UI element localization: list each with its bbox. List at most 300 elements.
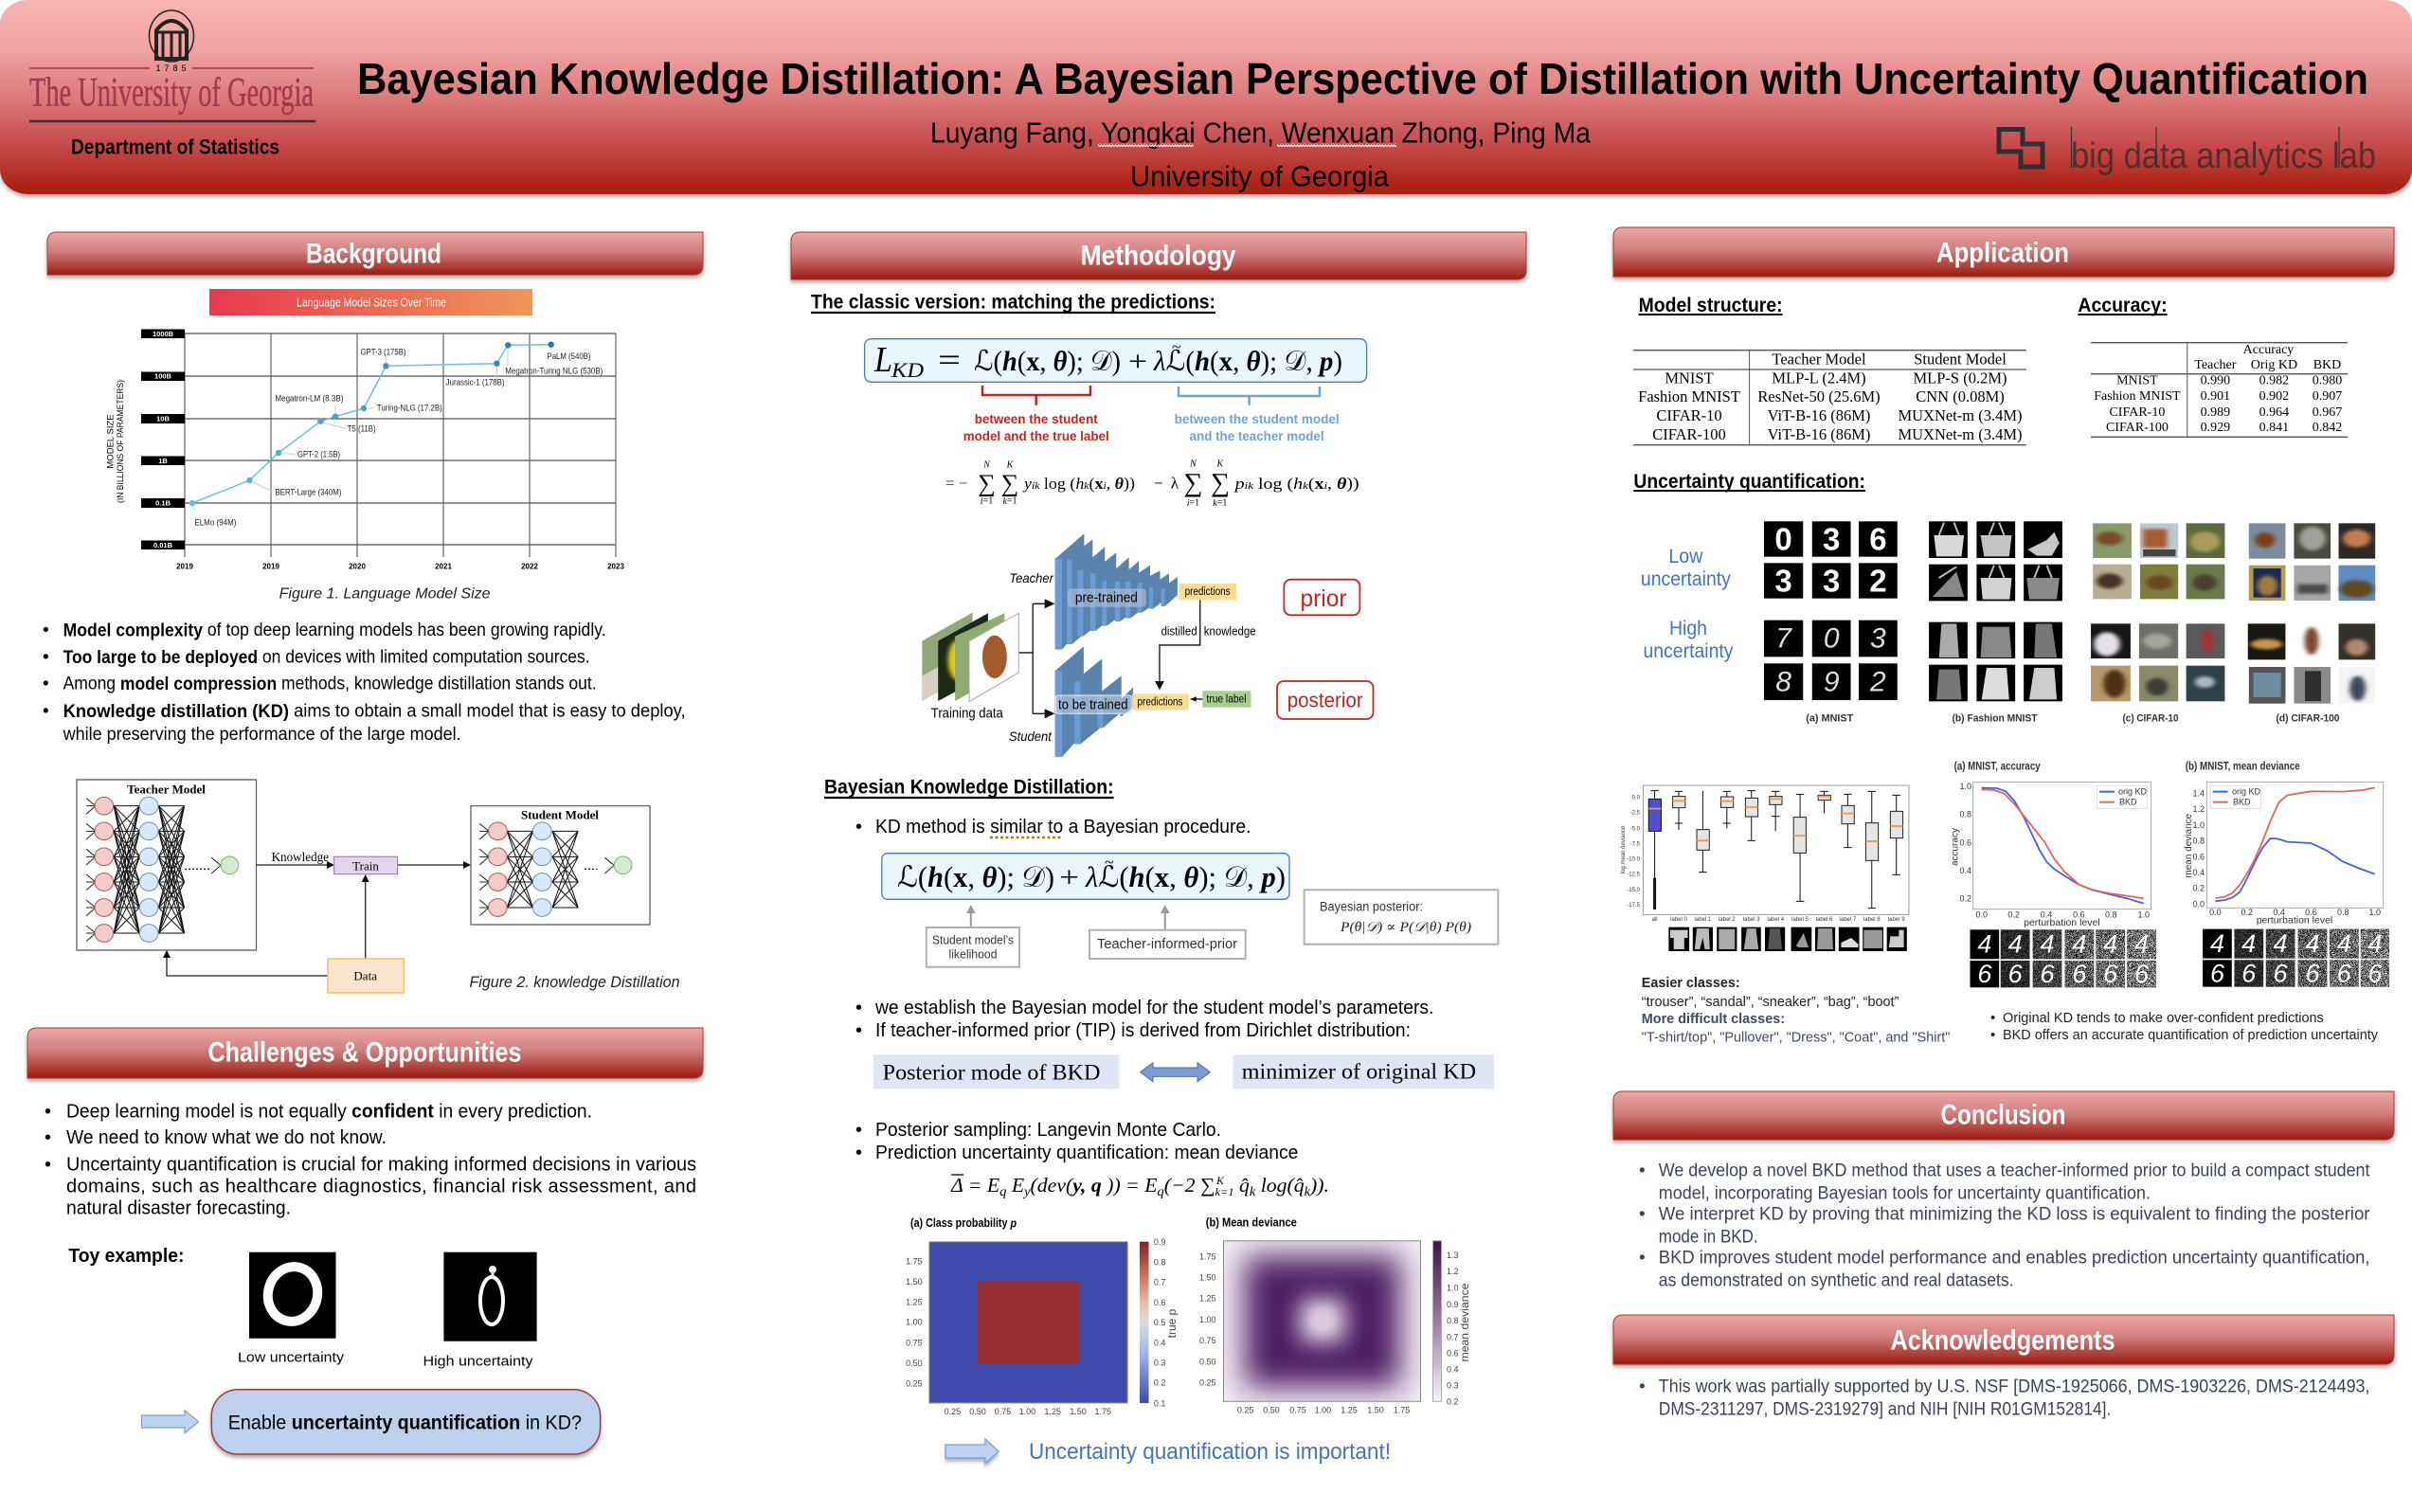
plot grid <box>141 330 616 557</box>
formula: KD loss: + <box>1128 346 1147 377</box>
image: low uncertainty digit: Low uncertainty <box>238 1349 345 1366</box>
formula: mean deviance: k=1 <box>1215 1185 1234 1198</box>
box plot axis labels: label 7 <box>1840 917 1857 923</box>
image grid captions <box>1806 712 2340 724</box>
background bullet list <box>43 621 686 745</box>
image grid: perturbed digits: 6 <box>2241 959 2257 987</box>
box: Bayesian posterior: P(θ|𝒟) ∝ P(𝒟|θ) P(θ) <box>1340 920 1471 935</box>
heatmap b tick labels: 0.2 <box>1447 1397 1459 1407</box>
arrows: likelihood and prior pointers <box>971 911 1165 930</box>
bullets: sampling and uncertainty: Prediction uncertainty quantification: mean deviance <box>875 1143 1298 1163</box>
box plot axis labels: label 6 <box>1816 917 1833 923</box>
table: model structure: Fashion MNIST <box>1638 387 1740 405</box>
table: accuracy: 0.989 <box>2201 405 2230 420</box>
chart: MNIST accuracy: 0.8 <box>1959 810 1971 819</box>
panel: conclusion <box>1613 1091 2394 1290</box>
chart: MNIST accuracy: 1.0 <box>1959 782 1971 791</box>
background bullet list: • <box>43 648 49 667</box>
heatmap b tick labels: 0.4 <box>1447 1365 1459 1375</box>
chart: MNIST accuracy: 0.0 <box>1975 909 1988 919</box>
heading: challenges and opportunities <box>27 1028 703 1078</box>
diagram: knowledge distillation <box>77 780 650 993</box>
heading: acknowledgements: Acknowledgements <box>1891 1324 2115 1357</box>
chart: mean deviance heatmap: (b) Mean deviance <box>1206 1215 1297 1230</box>
table: accuracy: 0.964 <box>2259 405 2289 420</box>
formula: expanded sums: k <box>1303 480 1309 492</box>
heatmap b tick labels: 1.00 <box>1199 1315 1216 1324</box>
department label: Department of Statistics <box>71 135 279 159</box>
heading: methodology: Methodology <box>1081 241 1236 271</box>
chart: MNIST accuracy: 0.6 <box>2073 909 2085 919</box>
heading: application: Application <box>1936 237 2069 269</box>
heatmap a tick labels: 1.50 <box>1070 1407 1087 1416</box>
x axis labels: 2019 <box>176 563 193 570</box>
heading: acknowledgements <box>1613 1315 2394 1364</box>
formula: expanded sums: k=1 <box>1213 498 1227 508</box>
chart: MNIST mean deviance: orig KD <box>2232 787 2261 797</box>
network text labels: true label <box>1207 693 1247 705</box>
formula: expanded sums: θ)) <box>1337 474 1358 493</box>
formula box: loss and posterior correspondence <box>882 853 1289 899</box>
data line and points <box>189 341 554 511</box>
box plot axis labels: -10.0 <box>1627 856 1641 862</box>
chart title banner <box>209 289 532 315</box>
formula: expanded sums: K <box>1006 460 1015 470</box>
acknowledgement text <box>1639 1377 2370 1419</box>
table: accuracy: 0.901 <box>2201 389 2230 404</box>
table: accuracy: 0.967 <box>2313 405 2342 420</box>
table: accuracy: CIFAR-10 <box>2109 405 2165 420</box>
bullets: application takeaways: Original KD tends to make over-confident predictions <box>2003 1010 2324 1026</box>
formula: expanded sums: h <box>1293 474 1309 493</box>
chart: MNIST accuracy: 0.2 <box>1959 894 1971 904</box>
panel: acknowledgements <box>1613 1315 2394 1419</box>
formula: expanded sums: x <box>1094 474 1104 493</box>
y axis tick labels: 0.1B <box>155 498 171 508</box>
formula: mean deviance: q <box>999 1185 1006 1199</box>
conclusion bullet list: model, incorporating Bayesian tools for uncertainty quantification. <box>1659 1184 2151 1203</box>
network text labels: to be trained <box>1058 697 1128 712</box>
chart: language model sizes over time <box>106 289 624 570</box>
callout: prior: prior <box>1300 585 1347 612</box>
image grid: MNIST samples: 3 <box>1823 563 1840 599</box>
model labels: BERT-Large (340M) <box>275 487 341 498</box>
chart: MNIST mean deviance: 0.6 <box>2305 908 2317 917</box>
table: model structure: ViT-B-16 (86M) <box>1768 406 1870 424</box>
table: accuracy: BKD <box>2313 358 2341 372</box>
teacher network layers <box>1055 533 1236 650</box>
formula: expanded sums: i=1 <box>1187 498 1199 508</box>
network text labels: predictions <box>1185 586 1231 598</box>
image grid: perturbed digits: 6 <box>2210 959 2225 987</box>
model labels: Jurassic-1 (178B) <box>446 377 505 388</box>
image grid: MNIST samples: 7 <box>1775 623 1792 654</box>
formula: expanded sums: i <box>1323 480 1327 492</box>
bullets: Bayesian model: we establish the Bayesian model for the student model’s parameters. <box>874 998 1433 1018</box>
chart: MNIST mean deviance: 1.0 <box>2192 820 2205 830</box>
chart: class probability heatmap: (a) Class probability p <box>910 1215 1017 1230</box>
table: model structure: CIFAR-10 <box>1656 406 1722 424</box>
box: student likelihood: likelihood <box>949 947 997 961</box>
table: accuracy: 0.841 <box>2259 421 2289 435</box>
x axis labels: 2021 <box>435 563 452 570</box>
acknowledgement text: This work was partially supported by U.S. NSF [DMS-1925066, DMS-1903226, DMS-2124493, <box>1659 1377 2370 1396</box>
subheading: accuracy: Accuracy: <box>2078 295 2168 316</box>
table: accuracy: Accuracy <box>2243 343 2294 357</box>
y axis title <box>106 380 125 503</box>
panel: challenges and opportunities <box>27 1028 703 1454</box>
y axis tick labels: 0.01B <box>153 541 173 549</box>
conclusion statement: Uncertainty quantification is important! <box>1029 1439 1391 1465</box>
heatmap a tick labels: 0.2 <box>1154 1378 1165 1388</box>
image grid: perturbed digits: 4 <box>2305 929 2320 958</box>
image grid: perturbed digits: 4 <box>1977 930 1991 959</box>
image grid: perturbed digits: 4 <box>2273 929 2288 958</box>
formula: expanded sums: − λ <box>1154 474 1179 493</box>
subheading: model structure: Model structure: <box>1639 295 1783 316</box>
formula: mean deviance: y <box>1022 1185 1031 1199</box>
formula: mean deviance: k <box>1250 1185 1256 1199</box>
box: student likelihood: Student model’s <box>932 932 1014 947</box>
chart: MNIST mean deviance: 0.0 <box>2192 900 2205 909</box>
formula: mean deviance <box>950 1174 1329 1199</box>
arrow <box>945 1439 999 1464</box>
panel: application <box>1613 227 2394 1046</box>
text: easier and harder classes: “trouser”, “sandal”, “sneaker”, “bag”, “boot” <box>1642 994 1899 1010</box>
conclusion bullet list: BKD improves student model performance and enables prediction uncertainty quantification, <box>1659 1249 2370 1268</box>
train and data flow arrows: Data <box>353 968 377 983</box>
challenges bullet list: natural disaster forecasting. <box>66 1197 291 1218</box>
heatmap b tick labels: 1.0 <box>1447 1284 1459 1293</box>
network text labels: Student <box>1009 729 1053 744</box>
y axis tick labels <box>153 330 174 549</box>
label: high uncertainty: uncertainty <box>1643 640 1734 662</box>
image grid: perturbed digits: 6 <box>2103 960 2118 988</box>
formula: KD loss: L <box>873 340 892 380</box>
heatmap a tick labels: 0.7 <box>1154 1278 1165 1287</box>
heatmap a tick labels: 0.6 <box>1154 1298 1165 1307</box>
y axis title: (IN BILLIONS OF PARAMETERS) <box>116 380 125 503</box>
heatmap a tick labels: 0.9 <box>1154 1237 1165 1247</box>
heatmap b tick labels: 0.7 <box>1447 1332 1459 1341</box>
bullets: Bayesian model <box>855 998 1433 1041</box>
model labels: ELMo (94M) <box>194 517 236 529</box>
icon: University of Georgia arch logo <box>150 10 193 62</box>
heatmap a tick labels: 0.1 <box>1154 1398 1165 1408</box>
student model box: Student Model <box>521 807 599 822</box>
label: low uncertainty: uncertainty <box>1641 568 1731 590</box>
image grid: perturbed digits: 6 <box>1977 960 1992 988</box>
table: model structure: MLP-S (0.2M) <box>1913 369 2007 387</box>
callout: posterior: posterior <box>1287 688 1363 712</box>
toy example label: Toy example: <box>68 1246 184 1267</box>
formula: mean deviance: k <box>1305 1185 1311 1199</box>
formula: expanded sums: , <box>1107 474 1115 493</box>
formula: mean deviance: q <box>1158 1185 1164 1199</box>
University of Georgia wordmark: The University of Georgia <box>29 70 314 116</box>
formula: expanded sums: ik <box>1032 480 1041 492</box>
challenges bullet list: Deep learning model is not equally confident in every prediction. <box>66 1101 592 1122</box>
logo rule and year: 1785 <box>155 63 186 73</box>
x axis labels: 2020 <box>349 563 366 570</box>
heatmap b tick labels: 1.50 <box>1367 1405 1384 1414</box>
box plot axis labels: -2.5 <box>1630 811 1641 817</box>
conclusion bullet list: • <box>1639 1161 1646 1180</box>
image grid: perturbed digits: 4 <box>2103 930 2117 959</box>
chart: MNIST accuracy <box>1951 762 2151 928</box>
train and data flow arrows: Train <box>352 858 379 873</box>
arrow <box>142 1411 199 1433</box>
box plot axis labels: label 2 <box>1719 917 1736 923</box>
image grid: perturbed digits: 4 <box>2040 930 2055 959</box>
heatmap a tick labels: 0.3 <box>1154 1358 1165 1367</box>
chart: MNIST accuracy: accuracy <box>1951 828 1961 866</box>
formula: expanded sums: ∑ <box>1001 470 1018 496</box>
train and data flow arrows: Knowledge <box>272 850 329 864</box>
chart: MNIST mean deviance: 1.0 <box>2368 908 2381 917</box>
challenges bullet list: Uncertainty quantification is crucial for making informed decisions in various <box>66 1154 696 1175</box>
network text labels: distilled <box>1161 623 1197 639</box>
bullets: Bayesian model: • <box>855 1020 862 1041</box>
y axis tick labels: 1B <box>158 457 168 465</box>
figure 2 caption: Figure 2. knowledge Distillation <box>470 974 680 991</box>
heatmap b tick labels <box>1199 1251 1471 1414</box>
formula: expanded sums: p <box>1234 474 1254 493</box>
heatmap a tick labels: 1.75 <box>1095 1407 1111 1416</box>
box: Bayesian posterior <box>1305 890 1498 945</box>
model labels: T5 (11B) <box>348 424 376 434</box>
image grid: perturbed digits: 6 <box>2305 959 2320 987</box>
bracket: student versus teacher <box>1175 387 1340 443</box>
formula: mean deviance: y, q )) = E <box>1072 1174 1156 1197</box>
chart: MNIST accuracy: (a) MNIST, accuracy <box>1954 762 2041 773</box>
chart: MNIST mean deviance: 0.2 <box>2192 884 2205 893</box>
challenges bullet list: • <box>45 1127 51 1148</box>
background bullet list: Too large to be deployed on devices with limited computation sources. <box>63 648 590 667</box>
callout: prior <box>1284 580 1359 615</box>
image: high uncertainty digit <box>423 1252 537 1370</box>
table: accuracy: 0.902 <box>2259 389 2289 404</box>
image grid: perturbed digits: 4 <box>2367 929 2383 958</box>
heatmap b tick labels: 1.50 <box>1199 1272 1216 1282</box>
subheading: classic version: The classic version: matching the predictions: <box>811 292 1215 313</box>
chart: MNIST mean deviance: 0.0 <box>2209 908 2222 917</box>
label: low uncertainty: Low <box>1668 546 1703 567</box>
y axis tick labels: 10B <box>156 415 170 423</box>
chart: mean deviance heatmap <box>1199 1215 1471 1414</box>
formula: KD loss: ℒ(h(x, θ); 𝒟) <box>974 346 1121 377</box>
x axis labels: 2019 <box>262 563 279 570</box>
heatmap b tick labels: 1.75 <box>1394 1405 1410 1414</box>
background bullet list: Among model compression methods, knowledge distillation stands out. <box>63 675 597 693</box>
chart: MNIST accuracy: 0.4 <box>2041 909 2052 919</box>
image grid: MNIST samples: 9 <box>1824 667 1840 697</box>
conclusion bullet list: • <box>1639 1249 1646 1268</box>
equivalence: posterior mode and minimizer: Posterior mode of BKD <box>883 1061 1101 1084</box>
table: accuracy: 0.842 <box>2313 421 2342 435</box>
panel: background <box>43 232 703 993</box>
box plot axis labels: log mean deviance <box>1621 825 1627 873</box>
image grid: perturbed digits: 4 <box>2008 930 2023 959</box>
image grid: MNIST samples <box>1764 521 1898 700</box>
background bullet list: • <box>43 675 49 693</box>
formula: mean deviance: )). <box>1309 1174 1329 1197</box>
formula: KD loss: KD <box>891 358 924 382</box>
chart: MNIST mean deviance: 0.2 <box>2241 908 2253 917</box>
x axis labels: 2022 <box>521 563 538 570</box>
challenges bullet list: domains, such as healthcare diagnostics, financial risk assessment, and <box>66 1177 696 1197</box>
x axis labels: 2023 <box>607 563 624 570</box>
formula: mean deviance: (dev( <box>1031 1174 1074 1197</box>
formula: mean deviance: E <box>1006 1174 1024 1197</box>
box plot axis labels: -17.5 <box>1627 903 1641 909</box>
image grid: perturbed digits: 4 <box>2241 929 2256 958</box>
subheading: uncertainty quantification: Uncertainty quantification: <box>1633 471 1865 493</box>
heatmap a tick labels: 1.25 <box>1044 1407 1061 1416</box>
label: low uncertainty <box>1641 546 1731 590</box>
heatmap b tick labels: 0.50 <box>1263 1405 1280 1414</box>
table: model structure: CNN (0.08M) <box>1916 387 2005 405</box>
heading: application <box>1613 227 2394 277</box>
heatmap b tick labels: 0.50 <box>1199 1358 1216 1367</box>
formula: mean deviance: log(q̂ <box>1255 1174 1305 1197</box>
conclusion bullet list: We develop a novel BKD method that uses a teacher-informed prior to build a compact student <box>1659 1161 2370 1180</box>
heading: methodology <box>791 232 1526 279</box>
heatmap a tick labels: 0.50 <box>969 1407 986 1416</box>
formula: mean deviance: (−2 ∑ <box>1164 1174 1215 1197</box>
chart: MNIST mean deviance <box>2184 762 2384 927</box>
heatmap b tick labels: mean deviance <box>1458 1283 1471 1362</box>
formula: expanded sums: ∑ <box>978 470 996 496</box>
table: accuracy: 0.907 <box>2313 389 2342 404</box>
image grid: perturbed digits: 6 <box>2337 959 2352 987</box>
box: teacher informed prior <box>1089 930 1246 959</box>
challenges bullet list: We need to know what we do not know. <box>66 1127 387 1148</box>
bracket: student versus true label: between the student <box>975 411 1098 426</box>
text: easier and harder classes <box>1642 975 1950 1046</box>
table: model structure: Teacher Model <box>1772 351 1866 368</box>
equivalence: posterior mode and minimizer: minimizer of original KD <box>1242 1059 1476 1084</box>
chart: MNIST accuracy: 0.2 <box>2007 909 2020 919</box>
conclusion bullet list <box>1639 1161 2370 1290</box>
background bullet list: • <box>43 621 49 640</box>
callout: enable uncertainty quantification <box>211 1390 601 1454</box>
text: easier and harder classes: "T-shirt/top", "Pullover", "Dress", "Coat", and "Shirt" <box>1642 1029 1950 1046</box>
model labels: GPT-2 (1.5B) <box>297 449 340 460</box>
box plot axis labels: -7.5 <box>1630 841 1641 847</box>
chart: MNIST mean deviance: (b) MNIST, mean deviance <box>2186 762 2300 773</box>
image grid: CIFAR-10 samples <box>2091 523 2224 701</box>
image grid: perturbed digits <box>1971 929 2389 988</box>
formula: expanded sums: ∑ <box>1183 468 1202 498</box>
y axis title: MODEL SIZE <box>106 414 116 469</box>
image grid captions: (c) CIFAR-10 <box>2122 712 2179 724</box>
heatmap b tick labels: 0.75 <box>1199 1336 1216 1345</box>
formula: KD loss: = <box>938 343 961 378</box>
label: high uncertainty: High <box>1669 618 1707 639</box>
chart: MNIST mean deviance: 1.4 <box>2192 789 2205 799</box>
bullet: KD similar to Bayesian: KD method is similar to a Bayesian procedure. <box>875 817 1251 837</box>
heading: conclusion <box>1613 1091 2394 1140</box>
image grid: perturbed digits: 6 <box>2072 960 2087 988</box>
heatmap a tick labels: 0.25 <box>945 1407 961 1416</box>
bullets: Bayesian model: • <box>855 998 862 1018</box>
chart: MNIST accuracy: 0.8 <box>2105 909 2117 919</box>
box plot axis labels: -15.0 <box>1627 888 1641 893</box>
formula: expanded sums: N <box>982 460 991 470</box>
table: accuracy: CIFAR-100 <box>2106 421 2169 435</box>
network text labels: predictions <box>1137 697 1183 709</box>
heatmap b tick labels: 1.75 <box>1199 1251 1216 1261</box>
image grid: perturbed digits: 6 <box>2367 959 2383 987</box>
heatmap b tick labels: 1.3 <box>1447 1251 1459 1260</box>
image grid: perturbed digits: 4 <box>2337 929 2351 958</box>
acknowledgement text: DMS-2311297, DMS-2319279] and NIH [NIH R01GM152814]. <box>1659 1400 2111 1419</box>
image grid: MNIST samples: 0 <box>1774 521 1792 557</box>
image grid: perturbed digits: 6 <box>2134 960 2150 988</box>
image grid: MNIST samples: 3 <box>1870 623 1886 654</box>
formula: expanded sums: ik <box>1245 480 1254 492</box>
text: easier and harder classes: More difficult classes: <box>1642 1011 1785 1027</box>
image grid captions: (d) CIFAR-100 <box>2276 712 2340 724</box>
image grid: perturbed digits: 4 <box>2072 930 2086 959</box>
heatmap b tick labels: 0.25 <box>1237 1405 1253 1414</box>
bullets: sampling and uncertainty: • <box>855 1143 862 1163</box>
table: accuracy: Teacher <box>2194 358 2237 372</box>
acknowledgement text: • <box>1639 1377 1646 1396</box>
heatmap b tick labels: 0.9 <box>1447 1300 1459 1309</box>
chart: MNIST mean deviance: 0.4 <box>2192 868 2205 877</box>
image grid: MNIST samples: 2 <box>1869 667 1886 697</box>
y axis tick labels: 1000B <box>153 330 174 338</box>
chart: class probability heatmap <box>906 1215 1179 1416</box>
challenges bullet list: • <box>45 1154 51 1175</box>
box plot axis labels <box>1621 795 1905 923</box>
icon: big data analytics lab logo: big data analytics lab <box>2071 136 2376 176</box>
formula: mean deviance: K <box>1215 1174 1225 1187</box>
challenges bullet list: • <box>45 1101 51 1122</box>
box plot axis labels: label 5 <box>1791 917 1809 923</box>
heading: challenges and opportunities: Challenges & Opportunities <box>208 1036 521 1069</box>
bullets: application takeaways: • <box>1990 1010 1995 1026</box>
chart: MNIST mean deviance: perturbation level <box>2257 915 2332 927</box>
callout: enable uncertainty quantification: Enable uncertainty quantification in KD? <box>228 1412 582 1434</box>
chart title banner: Language Model Sizes Over Time <box>297 296 446 309</box>
heatmap b tick labels: 0.3 <box>1447 1381 1459 1391</box>
bracket: student versus true label <box>963 386 1109 443</box>
conclusion bullet list: as demonstrated on synthetic and real datasets. <box>1659 1271 2014 1290</box>
heatmap b tick labels: 0.8 <box>1447 1316 1459 1325</box>
box plot axis labels: 0.0 <box>1632 795 1641 801</box>
table: accuracy: Fashion MNIST <box>2094 389 2181 404</box>
bullet: KD similar to Bayesian: • <box>855 817 862 837</box>
formula: expanded sums: , <box>1327 474 1337 493</box>
heatmap b tick labels: 0.6 <box>1447 1349 1459 1359</box>
chart: MNIST mean deviance: 0.4 <box>2273 908 2285 917</box>
figure 1 caption: Figure 1. Language Model Size <box>279 585 491 603</box>
conclusion bullet list: • <box>1639 1205 1646 1224</box>
formula box: loss and posterior correspondence: ℒ(h(x, θ); 𝒟) <box>897 860 1054 893</box>
model labels: PaLM (540B) <box>548 351 591 362</box>
x axis labels <box>176 563 624 570</box>
label: high uncertainty <box>1643 618 1734 662</box>
heatmap a tick labels: 0.4 <box>1154 1338 1165 1347</box>
chart: MNIST mean deviance: 0.8 <box>2192 837 2205 846</box>
heatmap a tick labels: 0.8 <box>1154 1257 1165 1267</box>
heatmap a tick labels: 0.50 <box>906 1359 923 1368</box>
heatmap a tick labels: 0.75 <box>995 1407 1011 1416</box>
student network layers <box>1018 599 1251 757</box>
